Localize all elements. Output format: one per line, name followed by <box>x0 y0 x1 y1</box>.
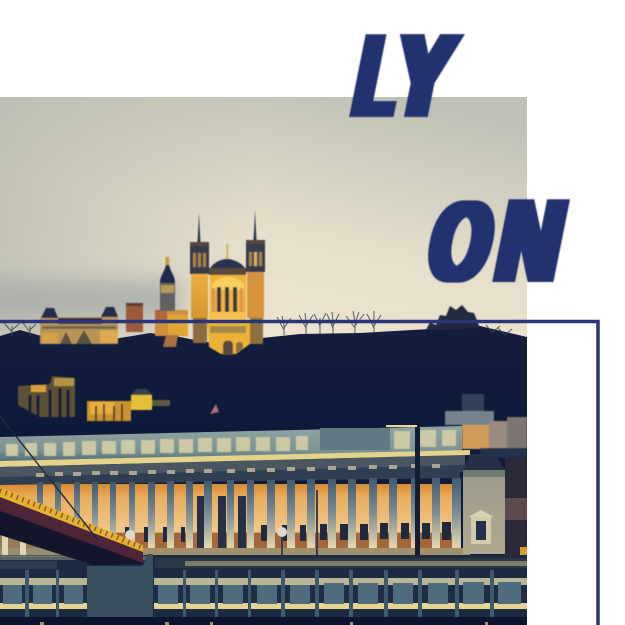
lamp post <box>386 425 420 558</box>
columns <box>37 478 461 550</box>
quay wall and balustrade <box>0 555 527 620</box>
sky <box>0 97 527 342</box>
city buildings behind, right <box>445 394 527 458</box>
facade walls <box>0 484 460 551</box>
dark evergreen tree <box>426 305 480 330</box>
title: LY: L <box>346 12 411 141</box>
plinth <box>0 548 470 555</box>
bridge deck <box>0 487 143 565</box>
pilasters <box>25 570 494 617</box>
hill: dark wooded slope <box>0 326 527 342</box>
triglyph highlights above columns <box>36 464 440 477</box>
right dark edge buildings <box>505 458 527 558</box>
basilica Notre-Dame de Fourviere <box>190 210 265 355</box>
street lamps <box>125 490 318 558</box>
title: ON: O <box>420 180 503 304</box>
cornice <box>0 450 470 467</box>
lower-left lit terrace buildings <box>18 376 219 422</box>
dark central portico <box>197 496 246 548</box>
suspension cable <box>0 416 98 540</box>
end pavilion <box>463 454 505 554</box>
left tower <box>190 213 209 343</box>
nave and dome <box>207 244 250 355</box>
bridge pier <box>87 554 153 617</box>
courthouse: Palais de Justice <box>0 426 527 558</box>
stone panels <box>3 582 521 604</box>
title: LY <box>346 11 464 141</box>
bare trees on the skyline <box>4 311 512 336</box>
frame line <box>0 322 598 625</box>
right tower <box>246 210 265 344</box>
water <box>0 617 527 625</box>
ground floor windows <box>125 522 451 542</box>
lit arches <box>0 578 527 585</box>
title: ON <box>420 175 574 305</box>
attic storey <box>0 426 462 466</box>
title: LY: Y <box>384 11 464 141</box>
chapel bell tower and annex <box>155 257 188 347</box>
chateau on the left <box>40 303 143 344</box>
photo: Lyon at dusk <box>0 97 527 625</box>
frieze <box>0 472 460 485</box>
title: ON: N <box>488 175 574 305</box>
